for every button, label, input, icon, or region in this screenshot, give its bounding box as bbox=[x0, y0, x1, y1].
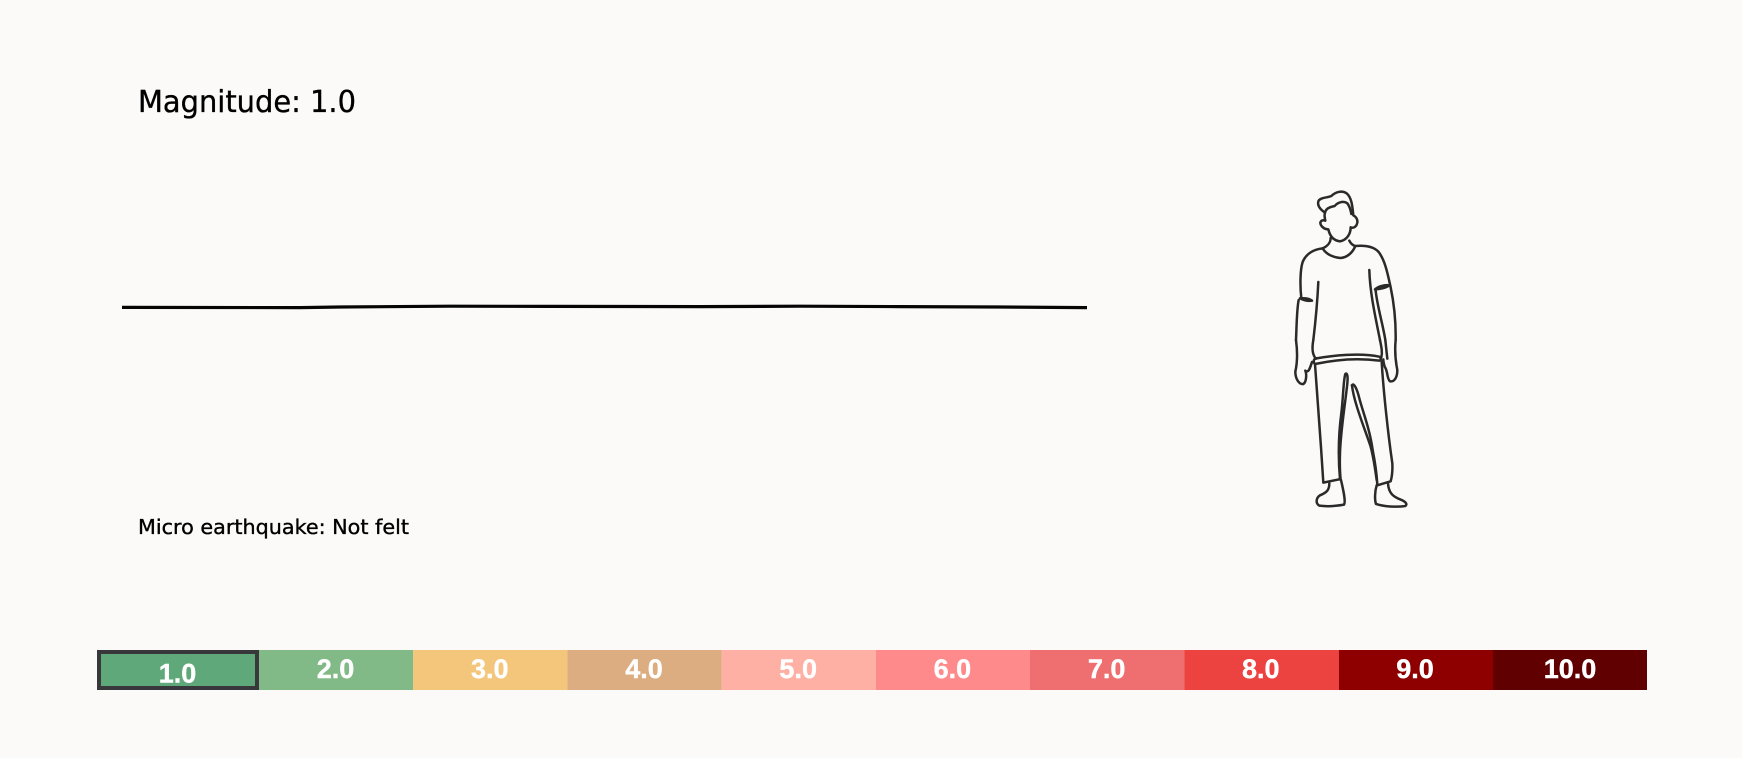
scale cell 4.0: 4.0 bbox=[625, 654, 663, 684]
scale cell 2.0: 2.0 bbox=[317, 654, 354, 684]
scale cell 3.0 bbox=[413, 650, 567, 690]
scale cell 8.0 bbox=[1184, 650, 1339, 690]
scale cell 9.0: 9.0 bbox=[1396, 654, 1434, 684]
illustration: standing person bbox=[1295, 192, 1406, 507]
scale cell 5.0: 5.0 bbox=[779, 654, 817, 684]
scale cell 4.0 bbox=[567, 650, 722, 690]
scale cell 7.0: 7.0 bbox=[1088, 654, 1125, 684]
scale cell 1.0 (selected) bbox=[99, 652, 257, 688]
scale cell 5.0 bbox=[722, 650, 876, 690]
scale cell 1.0 (selected): 1.0 bbox=[159, 658, 196, 688]
scale cell 9.0 bbox=[1339, 650, 1493, 690]
magnitude scale bar bbox=[99, 650, 1647, 690]
description text: Micro earthquake: Not felt bbox=[138, 515, 409, 539]
title: magnitude: Magnitude: 1.0 bbox=[138, 85, 356, 120]
seismograph wave line bbox=[122, 306, 1087, 308]
scale cell 10.0 bbox=[1493, 650, 1647, 690]
scale cell 2.0 bbox=[259, 650, 413, 690]
scale cell 10.0: 10.0 bbox=[1544, 654, 1596, 684]
scale cell 3.0: 3.0 bbox=[471, 654, 509, 684]
scale cell 8.0: 8.0 bbox=[1242, 654, 1280, 684]
scale cell 6.0: 6.0 bbox=[934, 654, 971, 684]
scale cell 6.0 bbox=[876, 650, 1030, 690]
scale cell 7.0 bbox=[1030, 650, 1184, 690]
